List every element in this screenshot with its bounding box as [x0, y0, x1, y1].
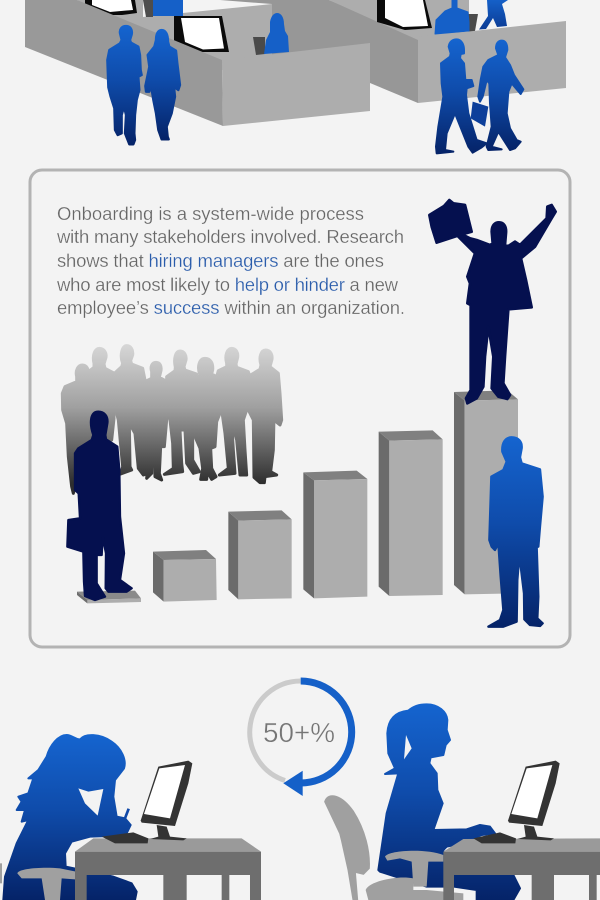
right wall front face — [418, 21, 566, 103]
walking man with briefcase — [471, 41, 523, 150]
crowd of grey figures — [62, 346, 282, 493]
blue man standing — [488, 437, 543, 627]
walking man gesturing — [436, 39, 487, 153]
left desk scene — [0, 735, 261, 900]
blue ring segment — [301, 681, 352, 783]
stool — [17, 868, 76, 900]
right desk scene — [325, 704, 600, 900]
walking man — [107, 26, 142, 144]
bar 1 — [153, 550, 217, 602]
panel: onboarding — [30, 170, 570, 647]
monitor: back left — [85, 0, 137, 15]
bar 4 — [379, 430, 443, 596]
dark wall between cubicles — [220, 0, 418, 103]
worker with chair, left cubicle — [253, 13, 289, 55]
monitor — [141, 761, 192, 840]
office chair back — [325, 796, 369, 900]
left cubicle interior — [77, 0, 272, 70]
desk — [443, 838, 600, 900]
person walking behind right cubicle — [479, 0, 508, 30]
chair, right cubicle — [468, 14, 478, 33]
left wall front face — [222, 43, 370, 126]
seated woman with ponytail — [378, 704, 520, 900]
cubicles illustration — [25, 0, 566, 153]
text block: Onboarding is a system-wide process — [57, 203, 364, 224]
bar 2 — [228, 510, 292, 599]
text block: shows that hiring managers are the ones — [57, 250, 384, 271]
50+% circular arrow — [250, 681, 352, 796]
text block: who are most likely to help or hinder a new — [56, 274, 399, 295]
right cubicle interior — [329, 0, 469, 40]
celebrating man on top bar — [429, 200, 556, 403]
worker, right cubicle — [435, 0, 469, 34]
navy man with briefcase — [67, 412, 132, 600]
bar 5 — [454, 390, 518, 594]
grey ring segment — [250, 681, 301, 780]
monitor — [508, 761, 560, 840]
chair edge — [0, 863, 2, 883]
text block: with many stakeholders involved. Research — [56, 226, 404, 247]
bar 3 — [303, 471, 367, 598]
walking woman — [145, 30, 180, 139]
arrow head — [283, 771, 303, 796]
monitor: front left — [174, 16, 229, 52]
platform under navy man — [77, 591, 141, 603]
desk — [75, 838, 261, 900]
chair seat and armrest — [366, 851, 463, 900]
text block — [56, 203, 405, 318]
percentage label: 50+% — [263, 717, 335, 748]
panel border — [30, 170, 570, 647]
text block: employee’s success within an organization. — [57, 297, 405, 318]
keyboard — [102, 832, 148, 843]
left wall side face — [25, 0, 223, 126]
stressed woman — [3, 735, 137, 900]
worker at back left — [143, 0, 183, 17]
keyboard — [473, 832, 516, 843]
monitor: right cubicle — [377, 0, 432, 30]
